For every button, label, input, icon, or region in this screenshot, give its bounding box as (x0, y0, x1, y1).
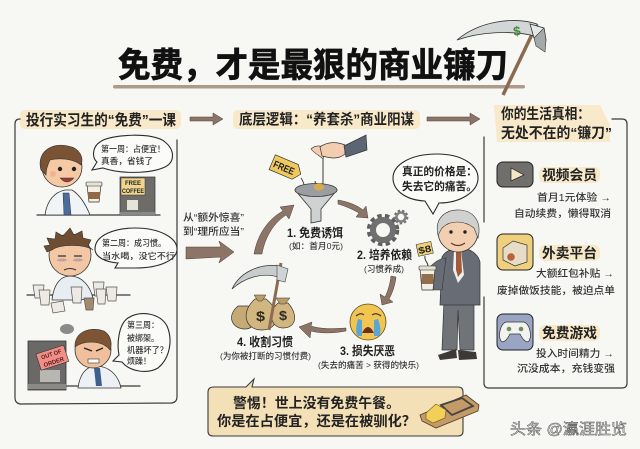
icon: funnel (295, 184, 337, 223)
label: step 3 (318, 343, 419, 370)
icon: intern angry (75, 329, 121, 388)
panel: life truth (484, 119, 627, 388)
speech bubble: week 3: 被绑架。 (127, 333, 159, 343)
icon: intern happy (40, 145, 90, 215)
icon: free coffee machine (120, 177, 155, 215)
label: step 3: 3. 损失厌恶 (340, 343, 395, 358)
callout: warning: 你是在占便宜，还是在被驯化？ (217, 413, 416, 429)
label: step 4 (220, 334, 311, 361)
text: video membership: 首月1元体验 → (537, 191, 611, 204)
arrow: step 1 to 2 (338, 200, 368, 218)
watermark: 头条 @瀛涯胜览 (510, 420, 627, 438)
panel: intern story (15, 119, 177, 404)
week 3 scene (28, 314, 170, 390)
speech bubble: week 3: 机器坏了？ (127, 345, 168, 355)
label: step 1: (如：首月0元) (289, 241, 343, 251)
transition label: 到“理所应当” (183, 225, 244, 238)
arrow: step 3 to 4 (299, 322, 346, 338)
arrow: step 4 to 1 (254, 205, 294, 254)
callout: warning (208, 379, 463, 436)
text: free games: 沉没成本，充钱变强 (517, 362, 615, 375)
icon: intern tired (44, 228, 93, 300)
label: food delivery: 外卖平台 (542, 245, 597, 261)
icon: broken coffee machine: ORDER (43, 357, 66, 369)
label: step 4: (为你被打断的习惯付费) (220, 351, 311, 361)
item: food delivery (497, 234, 615, 297)
speech bubble: week 2: 第二周：成习惯。 (102, 238, 166, 248)
heading: left panel: 投行实习生的“免费”一课 (26, 111, 176, 129)
arrow: step 2 to 3 (380, 276, 396, 305)
label: step 4: 4. 收割习惯 (237, 334, 293, 349)
arrow: center to right heading (427, 113, 480, 125)
icon: free tag (269, 155, 305, 188)
label: step 1 (287, 225, 343, 251)
icon: broken coffee machine (28, 324, 74, 390)
text: video membership (514, 191, 611, 220)
transition label (183, 211, 244, 238)
transition label: 从“额外惊喜” (183, 211, 244, 224)
figure: old man in suit (427, 210, 480, 360)
speech bubble: week 2 (95, 228, 177, 268)
speech bubble: real price (393, 154, 478, 214)
label: free games: 免费游戏 (542, 325, 597, 341)
text: food delivery (497, 267, 615, 297)
label: step 2: 2. 培养依赖 (357, 247, 412, 262)
speech bubble: real price: 真正的价格是： (402, 164, 477, 178)
icon: title scythe (457, 21, 546, 95)
speech bubble: week 1: 第一周：占便宜！ (101, 144, 165, 154)
icon: crying face (350, 304, 386, 340)
title: 免费，才是最狠的商业镰刀 (118, 47, 508, 85)
icon: free coffee machine: COFFEE (122, 189, 144, 195)
icon: gears (368, 210, 408, 244)
text: food delivery: 废掉做饭技能，被迫点单 (497, 284, 615, 297)
icon: game controller (497, 314, 533, 350)
icon: empty cups (33, 282, 117, 313)
speech bubble: week 3 (113, 314, 170, 371)
icon: coffee cup (86, 182, 102, 202)
icon: broken coffee machine: OUT OF (41, 349, 63, 361)
icon: money bags and scythe: $ (279, 308, 288, 323)
icon: takeout box (497, 234, 533, 270)
item: video membership (497, 162, 611, 220)
speech bubble: week 1 (92, 135, 172, 172)
label: step 2: (习惯养成) (364, 264, 404, 274)
icon: free tag: FREE (271, 159, 296, 178)
label: step 3: (失去的痛苦 > 获得的快乐) (318, 360, 419, 370)
heading: right column: 你的生活真相： (501, 105, 590, 123)
icon: video play (497, 162, 533, 187)
item: free games (497, 314, 615, 375)
callout: warning: 警惕！世上没有免费午餐。 (233, 395, 400, 411)
week 1 scene (37, 135, 172, 215)
cycle diagram (220, 135, 419, 370)
icon: title scythe: $ (512, 23, 522, 39)
label: step 2 (357, 247, 412, 274)
arrow: panel to cycle (186, 241, 234, 263)
text: food delivery: 大额红包补贴 → (536, 267, 614, 280)
speech bubble: week 3: 烦躁！ (127, 356, 151, 366)
heading: center column: 底层逻辑：“养套杀”商业阳谋 (239, 110, 414, 128)
speech bubble: week 3: 第三周： (127, 320, 159, 330)
heading: right column (494, 105, 612, 142)
businessman (393, 154, 480, 360)
icon: money bags and scythe (232, 263, 295, 330)
label: step 1: 1. 免费诱饵 (287, 225, 343, 240)
text: free games: 投入时间精力 → (536, 347, 614, 360)
icon: $8 coffee cup: $8 (418, 244, 433, 257)
heading: right column: 无处不在的“镰刀” (501, 124, 612, 142)
speech bubble: week 1: 真香，省钱了 (101, 156, 153, 166)
text: video membership: 自动续费，懒得取消 (514, 207, 611, 220)
icon: mouse trap with cheese (420, 395, 479, 428)
icon: money bags and scythe: $ (256, 308, 265, 324)
icon: hand with hook (311, 135, 367, 186)
text: free games (517, 347, 615, 375)
speech bubble: real price: 失去它的痛苦。 (402, 179, 477, 193)
icon: free coffee machine: FREE (125, 181, 141, 187)
label: video membership: 视频会员 (542, 167, 597, 183)
icon: $8 coffee cup (416, 241, 436, 290)
speech bubble: week 2: 当水喝，没它不行 (102, 251, 176, 261)
arrow: left to center heading (190, 113, 223, 125)
week 2 scene (27, 228, 177, 313)
